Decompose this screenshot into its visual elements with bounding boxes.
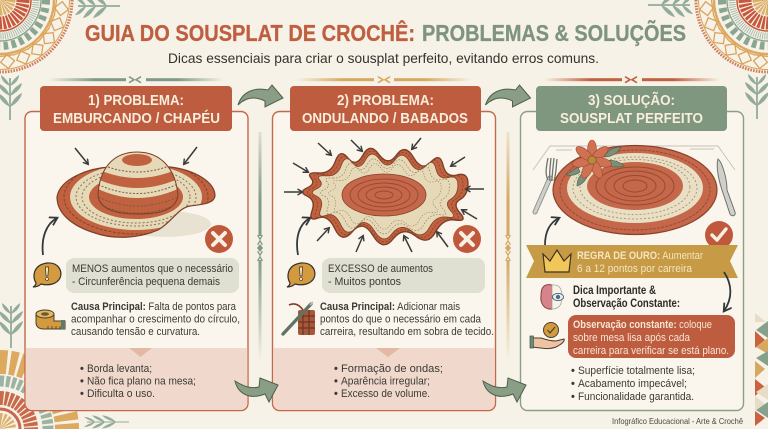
consequences list: • — [80, 388, 84, 400]
consequences list: • — [334, 376, 338, 388]
observation callout — [568, 315, 735, 358]
title: GUIA DO SOUSPLAT DE CROCHÊ: — [85, 19, 415, 46]
tip heading — [573, 285, 680, 310]
panel 3 header — [536, 86, 727, 131]
benefits list: • — [571, 391, 575, 403]
title: PROBLEMAS & SOLUÇÕES — [422, 19, 686, 46]
cause text — [320, 301, 494, 338]
cause text: pontos do que o necessário em cada — [320, 314, 482, 326]
down triangle — [376, 348, 400, 357]
tip heading: Dica Importante & — [573, 285, 656, 297]
panel 1 frame — [25, 112, 248, 410]
footer credit: Infográfico Educacional - Arte & Crochê — [612, 416, 743, 426]
arrows pointing at hat — [43, 147, 197, 255]
illustration: flower — [566, 140, 624, 186]
cause text: acompanhar o crescimento do círculo, — [71, 314, 240, 326]
illustration: fork — [535, 158, 557, 212]
illustration: warped crochet hat — [57, 152, 215, 237]
benefits list: • — [571, 365, 575, 377]
panel 2 header — [290, 86, 481, 131]
illustration: wavy crochet mat — [302, 148, 468, 245]
decoration: bottom-left mandala — [0, 362, 67, 429]
panel 1 header — [40, 86, 232, 131]
vertical divider: sage — [254, 132, 266, 362]
consequences list: • — [80, 376, 84, 388]
panel 1: emburcando / chapéu — [25, 86, 248, 410]
tip heading: Observação Constante: — [573, 298, 680, 310]
panel 2 frame — [272, 112, 496, 410]
consequences list: Não fica plano na mesa; — [87, 376, 196, 388]
panel 1 header: 1) PROBLEMA: — [88, 93, 184, 109]
problem callout — [66, 258, 239, 293]
icon: measuring tape — [36, 310, 65, 329]
golden rule ribbon: 6 a 12 pontos por carreira — [577, 263, 693, 275]
panel 2 header: ONDULANDO / BABADOS — [302, 111, 468, 127]
icon: brain and eye — [541, 285, 564, 309]
icon: hand with coin — [530, 322, 564, 349]
observation callout: carreira para verificar se está plano. — [573, 345, 729, 357]
golden rule ribbon — [526, 245, 738, 278]
problem callout: - Muitos pontos — [328, 276, 401, 288]
consequences list: Dificulta o uso. — [87, 388, 155, 400]
curved arrows panel 3 — [545, 218, 730, 311]
cause text: carreira, resultando em sobra de tecido. — [320, 326, 494, 338]
panel 2 pink footer — [273, 348, 495, 410]
decoration: top-right mandala — [696, 0, 768, 72]
icon: crochet hook and stitches — [283, 302, 315, 335]
arrow: panel 1 to 2, top — [238, 85, 283, 107]
consequences list: Aparência irregular; — [341, 376, 430, 388]
decoration: top-left mandala — [0, 0, 72, 72]
panel 3 frame — [520, 112, 744, 410]
arrow: panel 2 to 3, bottom — [483, 378, 526, 402]
illustration: knife — [717, 159, 735, 216]
problem callout: EXCESSO de aumentos — [328, 263, 433, 275]
icon: crown — [543, 250, 571, 272]
consequences list: • — [334, 388, 338, 400]
benefits list: Superfície totalmente lisa; — [578, 365, 695, 377]
x badge — [205, 225, 233, 253]
decoration: right triangle border — [755, 313, 768, 426]
cause text: Causa Principal: Falta de pontos para — [71, 301, 237, 313]
check badge — [705, 221, 733, 249]
arrow: panel 1 to 2, bottom — [235, 378, 278, 402]
panel 1 header: EMBURCANDO / CHAPÉU — [53, 110, 220, 127]
vertical divider: gold — [502, 132, 514, 362]
panel 3: sousplat perfeito — [520, 86, 744, 410]
benefits list: • — [571, 378, 575, 390]
cause text: Causa Principal: Adicionar mais — [320, 301, 460, 313]
divider ornaments above headers — [48, 77, 720, 83]
consequences list: Excesso de volume. — [341, 388, 430, 400]
arrow: panel 2 to 3, top — [486, 85, 530, 107]
cause text — [71, 301, 240, 338]
benefits list: Funcionalidade garantida. — [578, 391, 694, 403]
panel 2: ondulando / babados — [272, 86, 496, 410]
icon: alert speech bubble — [287, 263, 315, 287]
observation callout: sobre mesa lisa após cada — [573, 332, 690, 344]
problem callout: MENOS aumentos que o necessário — [72, 263, 233, 275]
consequences list: Formação de ondas; — [341, 363, 443, 375]
x badge — [453, 225, 481, 253]
illustration: perfect round sousplat — [553, 146, 717, 234]
benefits list: Acabamento impecável; — [578, 378, 687, 390]
problem callout — [322, 258, 485, 293]
subtitle: Dicas essenciais para criar o sousplat perfeito, evitando erros comuns. — [168, 50, 599, 66]
problem callout: - Circunferência pequena demais — [72, 276, 220, 288]
down triangle — [129, 348, 152, 357]
consequences list: • — [334, 363, 338, 375]
cause text: causando tensão e curvatura. — [71, 326, 200, 338]
consequences list: Borda levanta; — [87, 363, 152, 375]
benefits list — [571, 365, 695, 403]
title — [85, 19, 686, 46]
consequences list — [334, 363, 443, 400]
consequences list — [80, 363, 196, 400]
arrows pointing at mat — [284, 138, 484, 255]
consequences list: • — [80, 363, 84, 375]
observation callout: Observação constante: coloque — [573, 319, 712, 331]
panel 3 header: SOUSPLAT PERFEITO — [560, 111, 703, 127]
panel 3 header: 3) SOLUÇÃO: — [588, 91, 675, 109]
icon: alert speech bubble — [33, 263, 61, 287]
panel 2 header: 2) PROBLEMA: — [337, 93, 434, 109]
panel 1 pink footer — [26, 348, 247, 410]
illustration: table place mat lines — [533, 146, 735, 170]
golden rule ribbon: REGRA DE OURO: Aumentar — [577, 250, 703, 262]
